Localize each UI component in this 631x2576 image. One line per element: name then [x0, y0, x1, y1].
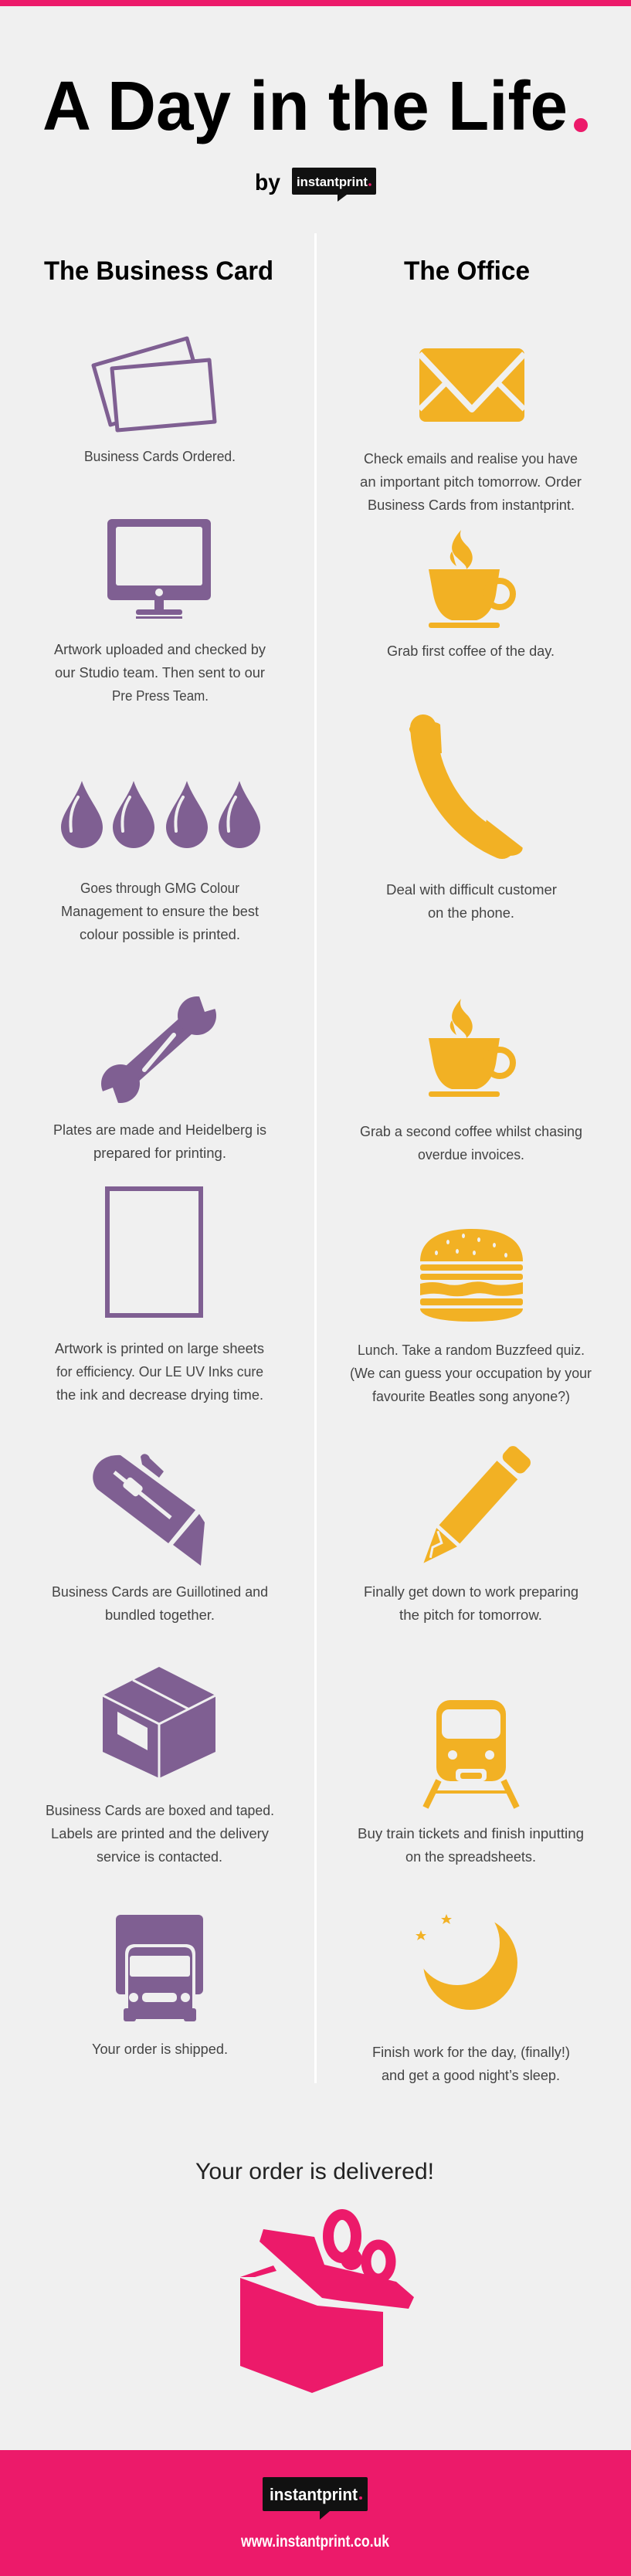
icon: box — [103, 1667, 215, 1778]
icon: phone handset — [409, 721, 525, 856]
text: guillotined: Business Cards are Guillotined and — [52, 1584, 268, 1600]
text: GMG colour: Goes through GMG Colour — [80, 881, 239, 896]
byline with logo: instantprint — [297, 175, 368, 189]
text: finally work: Finally get down to work preparing — [364, 1584, 578, 1600]
icon: delivery truck — [116, 1915, 203, 2021]
icon: ink drops — [61, 781, 260, 848]
icon: business cards — [93, 338, 215, 430]
text: GMG colour: Management to ensure the best — [61, 904, 259, 919]
text: boxed and taped: Labels are printed and the delivery — [51, 1826, 269, 1841]
text: your order is delivered: Your order is delivered! — [195, 2159, 434, 2184]
icon: pencil — [413, 1444, 533, 1573]
icon: envelope — [419, 348, 524, 422]
text: finish work: and get a good night’s sleep. — [382, 2068, 560, 2083]
text: lunch — [350, 1342, 592, 1404]
footer url: www.instantprint.co.uk — [240, 2533, 389, 2551]
icon: monitor — [107, 519, 211, 619]
icon: craft knife — [93, 1454, 205, 1566]
text: boxed and taped: Business Cards are boxed and taped. — [46, 1803, 274, 1818]
byline with logo: by — [255, 170, 280, 195]
byline with logo — [255, 168, 376, 202]
text: second coffee: overdue invoices. — [418, 1147, 524, 1162]
text: lunch: Lunch. Take a random Buzzfeed quiz. — [358, 1342, 585, 1358]
heading: The Office: The Office — [404, 256, 530, 286]
text: large sheets: the ink and decrease drying time. — [56, 1387, 263, 1403]
text: guillotined: bundled together. — [105, 1607, 215, 1623]
text: difficult customer — [386, 882, 557, 921]
icon: large sheet — [107, 1189, 201, 1315]
text: large sheets: for efficiency. Our LE UV Inks cure — [56, 1364, 263, 1380]
text: plates — [53, 1122, 266, 1161]
text: finish work: Finish work for the day, (finally!) — [372, 2045, 570, 2060]
text: check emails: an important pitch tomorrow. Order — [360, 474, 582, 490]
text: second coffee: Grab a second coffee whilst chasing — [360, 1124, 582, 1139]
heading: The Business Card: The Business Card — [44, 256, 273, 286]
text: train tickets — [358, 1826, 584, 1865]
text: check emails: Business Cards from instantprint. — [368, 497, 575, 513]
footer — [0, 2450, 631, 2576]
text: plates: prepared for printing. — [93, 1145, 226, 1161]
icon: burger — [420, 1229, 523, 1322]
text: check emails — [360, 451, 582, 513]
text: business cards ordered: Business Cards Ordered. — [84, 449, 236, 464]
text: finally work — [364, 1584, 578, 1623]
text: boxed and taped: service is contacted. — [97, 1849, 222, 1865]
icon: wrench — [100, 989, 218, 1112]
text: large sheets: Artwork is printed on large sheets — [55, 1341, 264, 1356]
icon: moon and stars — [415, 1900, 517, 2010]
text: GMG colour: colour possible is printed. — [80, 927, 240, 942]
text: check emails: Check emails and realise you have — [364, 451, 578, 467]
footer logo — [263, 2477, 368, 2520]
text: boxed and taped — [46, 1803, 274, 1865]
text: artwork uploaded: Artwork uploaded and checked by — [54, 642, 266, 657]
icon: train — [426, 1700, 517, 1807]
icon: coffee cup 1 — [429, 530, 513, 628]
text: finish work — [372, 2045, 570, 2083]
text: lunch: (We can guess your occupation by your — [350, 1366, 592, 1381]
text: second coffee — [360, 1124, 582, 1162]
text: finally work: the pitch for tomorrow. — [399, 1607, 542, 1623]
text: guillotined — [52, 1584, 268, 1623]
text: lunch: favourite Beatles song anyone?) — [372, 1389, 570, 1404]
text: difficult customer: on the phone. — [428, 905, 514, 921]
text: train tickets: Buy train tickets and finish inputting — [358, 1826, 584, 1841]
icon: gift box — [240, 2215, 414, 2393]
text: artwork uploaded — [54, 642, 266, 704]
text: artwork uploaded: Pre Press Team. — [112, 688, 209, 704]
text: grab first coffee: Grab first coffee of the day. — [387, 643, 555, 659]
text: artwork uploaded: our Studio team. Then sent to our — [55, 665, 265, 680]
text: shipped: Your order is shipped. — [92, 2041, 228, 2057]
text: GMG colour — [61, 881, 259, 942]
text: difficult customer: Deal with difficult customer — [386, 882, 557, 898]
icon: coffee cup 2 — [429, 999, 513, 1097]
title: A Day in the Life — [42, 68, 568, 145]
text: plates: Plates are made and Heidelberg is — [53, 1122, 266, 1138]
text: train tickets: on the spreadsheets. — [405, 1849, 536, 1865]
footer logo: instantprint — [270, 2485, 358, 2504]
text: large sheets — [55, 1341, 264, 1403]
